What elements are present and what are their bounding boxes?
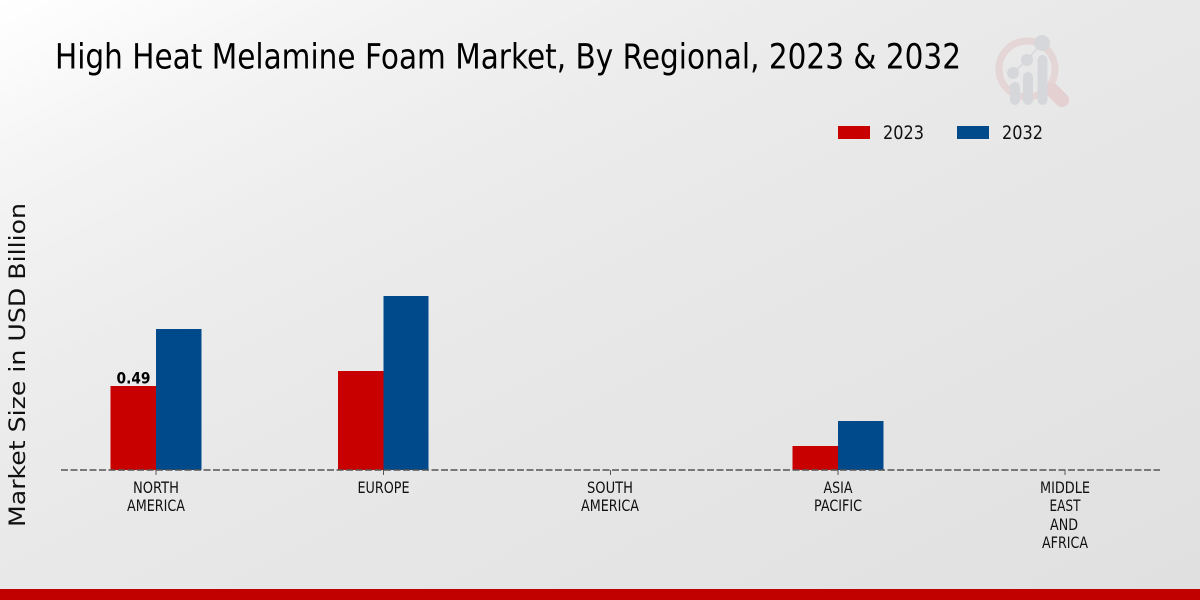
category label: South America: AMERICA (581, 496, 639, 515)
y axis label: Market Size in USD Billion (5, 203, 31, 527)
category label: North America: AMERICA (127, 496, 185, 515)
legend (838, 122, 1043, 144)
category label: Middle East and Africa: AND (1050, 515, 1078, 534)
title: High Heat Melamine Foam Market, By Regional, 2023 & 2032 (55, 38, 961, 78)
category label: Middle East and Africa: EAST (1050, 496, 1081, 515)
legend item: 2032: 2032 (1002, 122, 1043, 144)
category label: Middle East and Africa: AFRICA (1042, 533, 1088, 552)
bar chart (61, 296, 1160, 552)
category label: Asia Pacific: ASIA (824, 478, 853, 497)
bars: North America (110, 329, 202, 470)
baseline (61, 469, 1160, 471)
category label: Middle East and Africa: MIDDLE (1040, 478, 1090, 497)
bars: Europe (338, 296, 428, 470)
value label: 0.49 (116, 368, 150, 388)
icon: magnifier logo (999, 35, 1062, 105)
category label: Europe: EUROPE (358, 478, 410, 497)
category label: North America: NORTH (133, 478, 179, 497)
bars: Asia Pacific (792, 421, 884, 470)
category label: Asia Pacific: PACIFIC (814, 496, 862, 515)
legend item: 2032 (957, 122, 1043, 144)
category label: South America: SOUTH (587, 478, 633, 497)
legend item: 2023 (838, 122, 924, 144)
legend item: 2023: 2023 (883, 122, 924, 144)
footer bar (0, 589, 1200, 600)
